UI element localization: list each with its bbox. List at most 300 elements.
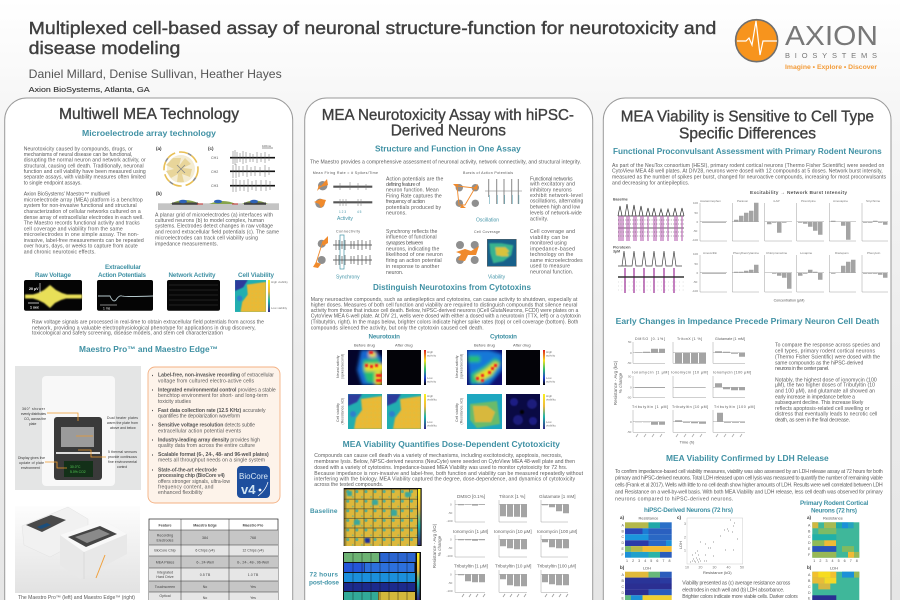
text: species comparison: same compounds as the hiPSC-derived xyxy=(775,360,863,366)
photo: Maestro instrument annotated: provide continuous xyxy=(108,455,137,459)
heatmaps: cytotoxin: Before drug xyxy=(474,342,495,348)
text: introduction: over hours, days, or weeks to capture from acute xyxy=(24,244,138,250)
callout: feature list: toxicity studies xyxy=(158,399,191,405)
text: scatter caption: Viability presented as (c) average resistance across xyxy=(682,581,791,587)
text: introduction: and chronic neurotoxic effects. xyxy=(24,250,96,256)
text: viability: same microelectrodes xyxy=(530,258,583,264)
axis label: time: Time (h) xyxy=(680,440,695,444)
bar chart: Tributyltin early 10 xyxy=(672,405,708,437)
text: viability xyxy=(530,229,583,276)
diagram: oscillation: Bursts of Action Potentials xyxy=(463,171,513,175)
table: Maestro comparison: Feature xyxy=(159,524,171,528)
heatmap: hiPSC resistance: A xyxy=(622,524,624,528)
label: baseline: Baseline xyxy=(310,508,338,515)
diagram: activity: Activity xyxy=(337,216,353,222)
bar chart: 4-AP xyxy=(765,199,792,241)
callout: feature list: Sensitive voltage resolution detects subtle xyxy=(158,423,255,429)
text: LDH paragraph: primary and hiPSC-derived neurons. Total LDH released upon cell lysis was measured to quantify the number of remaining viable xyxy=(615,476,883,482)
bar chart: Phenylbenzylamine: Phenylbenzylamine xyxy=(733,251,759,255)
callout: feature list: meets all throughput needs on a single system xyxy=(158,458,265,464)
text: cytotoxicity paragraph: Compounds can cause cell death via a variety of mechanisms, including excitotoxicity, apoptosis, necrosis, xyxy=(314,453,562,459)
text: oscillation: with excitatory and xyxy=(530,182,575,188)
heatmap: hiPSC LDH: LDH xyxy=(643,566,651,570)
plot: network activity xyxy=(167,280,220,311)
text: introduction: structural, causing cell death. Traditionally, neuronal xyxy=(24,163,144,169)
text: species comparison: To compare the response across species and xyxy=(775,343,880,349)
text: introduction: characterization of cellular networks cultured on a xyxy=(24,209,141,215)
callout: feature list: voltage from cultured electro-active cells xyxy=(158,378,254,384)
chart title: network burst intensity: Excitability → Network Burst Intensity xyxy=(750,190,847,196)
bar chart: Pirenzipine xyxy=(797,199,824,241)
bar chart: Ionomycin [1 µM] xyxy=(446,529,488,558)
bar chart: DMSO early: 50 xyxy=(628,340,632,344)
raster plot: baseline xyxy=(613,198,684,241)
heading: MEA Viability is Sensitive xyxy=(621,109,874,142)
text: oscillation: Functional networks xyxy=(530,176,573,182)
figure: extracellular traces c xyxy=(208,144,275,192)
heatmap: cell viability: Low viability xyxy=(271,306,288,310)
text: oscillation: inhibitory neurons xyxy=(530,187,572,193)
heatmaps: cytotoxin: viability xyxy=(546,398,556,402)
text: cytotoxicity paragraph: across the tested compounds. xyxy=(314,482,383,488)
label: primary rodent cortical neurons xyxy=(800,500,869,515)
text: signal caption xyxy=(32,319,264,337)
bar chart: Amoxicillin: Amoxicillin xyxy=(703,251,718,255)
axis label: resistance change: % change xyxy=(618,372,623,393)
bar chart: Glutamate [1 mM] xyxy=(539,494,576,522)
bar chart: Ionomycin [1 µM]: 0 xyxy=(450,538,452,542)
bar chart: Tributyltin early 1: Tributyltin [1 µM] xyxy=(632,405,668,409)
heatmaps: neurotoxin: (spikes/second) xyxy=(340,354,344,379)
table: Maestro comparison: BioCore Chip xyxy=(154,548,176,552)
axis label: resistance: % change xyxy=(437,535,442,556)
bar chart: Pirenzipine: Pirenzipine xyxy=(801,199,816,203)
text: proconvulsant paragraph: measured as the number of spikes per burst, changed for neuroactive compounds, increasing for most proconvulsants xyxy=(612,175,886,181)
bar chart: Amoxicillin: -100 xyxy=(692,289,698,293)
heatmap: primary rodent resistance: C xyxy=(808,535,811,539)
label: raw voltage: Raw Voltage xyxy=(35,272,71,279)
text: activity: defining feature of xyxy=(386,182,421,188)
text: cytotoxicity paragraph: membrane lysis. Below, NPSC-derived neurons (NeuCyte) were seeded on CytoView MEA 48-well plate and then xyxy=(314,459,575,465)
bar chart: Ionomycin [100 µM] xyxy=(537,529,577,557)
label: 72 hours post-dose xyxy=(309,572,339,586)
table: Maestro comparison: 384 xyxy=(202,536,208,540)
text: synchrony: Synchrony reflects the xyxy=(386,229,437,235)
text: viability: viability can be xyxy=(530,235,568,241)
table: Maestro comparison: Electrodes xyxy=(157,538,174,542)
figure: extracellular traces c: 100ms xyxy=(262,144,272,148)
text: synchrony: likelihood of one neuron xyxy=(386,252,443,258)
heatmaps: cytotoxin: Low xyxy=(546,420,552,424)
bar chart: TritonX early: TritonX [1 %] xyxy=(677,337,702,341)
bar chart: Tributyltin early 1 xyxy=(627,405,668,437)
text: oscillation: oscillations, alternating xyxy=(530,199,583,205)
text: oscillation xyxy=(530,176,583,222)
heading: MEA Neurotoxicity Assay with hiPSC-Derived Neurons: Derived Neurons xyxy=(391,123,506,140)
heatmaps: neurotoxin: (Resistance, kΩ) xyxy=(340,398,344,424)
heatmap: primary rodent resistance: E xyxy=(808,547,811,551)
label: primary rodent cortical neurons: Primary Rodent Cortical xyxy=(800,500,869,507)
diagram: synchrony xyxy=(313,230,372,280)
authors: Daniel Millard, Denise Sullivan, Heather Hayes xyxy=(29,67,282,81)
bar chart: Tributyltin early 10: Tributyltin [10 µM] xyxy=(672,405,708,409)
bar chart: Chlorpromazine: Chlorpromazine xyxy=(766,251,788,255)
label: primary rodent cortical neurons: Neurons (72 hrs) xyxy=(811,508,857,515)
photo: Maestro instrument annotated: 360° shower xyxy=(22,407,46,411)
bar chart: Paroxon xyxy=(732,199,759,241)
bar chart: Tributyltin early 1: 0 xyxy=(630,420,632,424)
subheading: structure and function: Structure and Function in One Assay xyxy=(375,145,521,154)
text: synchrony: synapses between xyxy=(386,241,423,247)
text: viability: used to measure xyxy=(530,264,570,270)
text: synchrony xyxy=(386,229,443,276)
callout: feature list xyxy=(148,367,280,503)
bar chart: Amoxicillin: 0 xyxy=(696,271,698,275)
text: viability: impedance-based xyxy=(530,246,575,252)
bar chart: Tributyltin early 100 xyxy=(713,405,755,437)
bar chart: Tributyltin [1 µM]: -50 xyxy=(448,581,453,585)
heading: MEA Viability is Sensitive: MEA Viability is Sensitive to Cell Type xyxy=(621,109,874,126)
bar chart: Glutamate early: Glutamate [1 mM] xyxy=(715,337,745,341)
text: species comparison: distress that eventually leads to necrotic cell xyxy=(775,412,877,418)
callout: feature list: Scalable format (6-, 24-, 48- and 96-well plates) xyxy=(158,452,269,458)
text: oscillation: between high and low xyxy=(530,205,580,211)
heatmap: hiPSC resistance xyxy=(620,515,672,563)
table: Maestro comparison: 6-, 24-, 48-, 96-Well xyxy=(237,560,269,564)
table: Maestro comparison: Recording xyxy=(157,534,173,538)
bar chart: TritonX [1 %] xyxy=(499,494,527,522)
heatmap: hiPSC resistance: C xyxy=(622,535,624,539)
label: extracellular action potentials: Extracellular xyxy=(105,264,142,271)
heatmap: hiPSC resistance: D xyxy=(622,541,624,545)
bar chart: TritonX early xyxy=(673,337,706,364)
bar chart: Tributyltin [1 µM]: Tributyltin [1 µM] xyxy=(454,564,488,568)
photo: Maestro instrument annotated: warm the plate from xyxy=(107,421,138,425)
bar chart: Phenylbenzylamine xyxy=(732,251,759,292)
heatmaps: neurotoxin: High xyxy=(427,394,434,398)
bar chart: DMSO early: -50 xyxy=(627,361,632,365)
bar chart: Acetaminophen xyxy=(692,199,727,242)
diagram: activity xyxy=(313,171,378,222)
bar chart: Loxapine: Loxapine xyxy=(800,251,813,255)
plot: raw voltage xyxy=(24,280,82,311)
heatmap: primary rodent LDH: C xyxy=(808,585,811,589)
text: activity: potentials produced by xyxy=(386,205,441,211)
heatmap: hiPSC resistance: a) xyxy=(620,515,625,520)
heatmaps: cytotoxin: Cytotoxin xyxy=(490,334,517,340)
bar chart: Strychnine xyxy=(862,199,888,241)
text: species comparison xyxy=(775,343,880,424)
text: activity: neuron function. Mean xyxy=(386,188,439,194)
label: hiPSC-derived neurons: hiPSC-Derived Neurons (72 hrs) xyxy=(644,507,733,514)
bar chart: Ionomycin [10 µM]: Ionomycin [10 µM] xyxy=(494,529,532,534)
heatmap: primary rodent resistance: F xyxy=(808,553,811,557)
subheading: Microelectrode array technology: Microelectrode array technology xyxy=(82,129,217,138)
text: synchrony: in response to another xyxy=(386,264,440,270)
callout: feature list: enhanced flexibility xyxy=(158,490,203,496)
text: synchrony: neuron. xyxy=(386,270,403,276)
plot: raw voltage: 1 sec xyxy=(30,306,39,310)
text: species comparison: µM), the two higher doses of Tributyltin (10 xyxy=(775,383,875,389)
scatter plot: LDH vs resistance: Resistance (kΩ) xyxy=(703,570,732,575)
bar chart: Tributyltin early 1: -50 xyxy=(627,430,632,434)
heatmap: hiPSC LDH: D xyxy=(622,591,624,595)
bar chart: Ionomycin early 100 xyxy=(713,370,751,398)
figure: extracellular traces c: (c) xyxy=(208,146,214,151)
heatmap: hiPSC LDH xyxy=(620,565,672,600)
text: figure caption: cultured neurons (b) to model complex, human xyxy=(155,218,264,224)
heading: MEA Viability is Sensitive: Specific Differences xyxy=(679,125,816,142)
axis label: resistance change: Resistance - Avg (kΩ) xyxy=(613,360,618,405)
table: Maestro comparison: Integrated xyxy=(157,570,173,574)
text: introduction: microelectrode array (MEA) platform is a benchtop xyxy=(24,198,143,204)
bar chart: Acetaminophen: 50 xyxy=(694,211,698,215)
subheading: LDH release: MEA Viability Confirmed by LDH Release xyxy=(666,454,829,463)
text: LDH paragraph: To confirm impedance-based cell viability measures, viability was also assessed by an LDH release assay at 72 hours for both xyxy=(615,469,883,475)
bar chart: Amoxicillin: 100 xyxy=(693,252,698,256)
heatmaps: neurotoxin: Before drug xyxy=(354,342,375,348)
callout: feature list: benchtop environment for short- and long-term xyxy=(158,393,268,399)
text: LDH paragraph: neurons compared to hiPSC-derived neurons. xyxy=(615,496,733,502)
bar chart: Tributyltin [100 µM] xyxy=(537,564,576,597)
text: distinguish paragraph: compounds silenced the activity, but only the cytotoxin caused cell death. xyxy=(311,326,484,332)
text: activity: frequency of action xyxy=(386,199,425,205)
table: Maestro comparison: 768 xyxy=(250,536,256,540)
callout: feature list: Industry-leading array density provides high xyxy=(158,437,260,443)
label: extracellular action potentials: Action Potentials xyxy=(98,272,146,279)
affiliation: Axion BioSystems, Atlanta, GA xyxy=(29,85,150,94)
callout: feature list: quantifies the depolarization waveform xyxy=(158,414,240,420)
bar chart: Ionomycin early 1: Ionomycin [1 µM] xyxy=(632,370,669,374)
heatmaps: neurotoxin: Neurotoxin xyxy=(368,334,400,340)
title: Multiplexed cell-based assay of neuronal structure-function for neurotoxicity and xyxy=(29,18,716,38)
label: network activity: Network Activity xyxy=(168,272,216,279)
axis label: resistance xyxy=(432,523,442,568)
text: scatter caption: electrodes in each well and (b) LDH absorbance. xyxy=(682,587,784,593)
text: synchrony: influence of functional xyxy=(386,235,437,241)
bar chart: Diazepam xyxy=(829,251,856,292)
icon: BioCore v4 badge: BioCore xyxy=(239,472,269,481)
logo: Axion BioSystems: AXION xyxy=(785,20,878,51)
bar chart: Acetaminophen: Acetaminophen xyxy=(700,199,721,203)
plot: action potentials: 1 ms xyxy=(103,306,110,310)
table: Maestro comparison: Maestro Pro xyxy=(243,524,264,528)
diagram: activity: Mean Firing Rate = # Spikes/Time xyxy=(313,171,378,175)
text: introduction: mechanisms of neural disease can be functional, xyxy=(24,152,132,158)
callout: feature list: processing chip (BioCore v4) xyxy=(158,473,225,479)
text: cytotoxicity paragraph: dosed with a variety of cytotoxins. Impedance-based MEA Viability was used to monitor cytotoxicity for 72 hrs. xyxy=(314,465,567,471)
photo: Maestro instrument annotated: update of plate xyxy=(19,461,44,465)
bar chart: Acetaminophen: -100 xyxy=(692,238,698,242)
heatmaps: neurotoxin: viability xyxy=(427,398,437,402)
text: figure caption: and record extracellular field potentials (c). The same xyxy=(155,230,279,236)
table: Maestro comparison: 6 Chips (v4) xyxy=(195,548,215,552)
table: Maestro comparison: Touchscreen xyxy=(155,585,175,589)
heatmap: cell viability: High viability xyxy=(271,280,288,284)
text: figure caption: impedance measurements. xyxy=(155,241,218,247)
figure: extracellular traces c: CH1 xyxy=(211,156,218,160)
text: proconvulsant paragraph: and decreasing for antiepileptics. xyxy=(612,180,689,186)
text: figure caption: microelectrodes can track cell viability using xyxy=(155,235,258,241)
bar chart: Acetaminophen: 100 xyxy=(693,201,698,205)
heading: MEA Neurotoxicity Assay with hiPSC-Derived Neurons: MEA Neurotoxicity Assay with hiPSC- xyxy=(322,107,574,124)
diagram: synchrony: Synchrony xyxy=(336,274,360,280)
photo: Maestro instrument annotated: fine environmental xyxy=(108,460,137,464)
text: introduction: dense array of extracellular electrodes in each well. xyxy=(24,215,144,221)
diagram: viability: Cell Coverage xyxy=(474,230,500,234)
bar chart: Tributyltin [10 µM] xyxy=(495,564,531,597)
text: introduction: cell coverage and viability from the same xyxy=(24,226,123,232)
bar chart: DMSO [0.1%] xyxy=(446,494,485,523)
text: LDH paragraph: cells (Frank et al 2017). Wells with little to no cell death show higher amounts of LDH. Results were well correlated between LDH xyxy=(615,483,883,489)
photo: Maestro Pro and Maestro Edge xyxy=(15,506,140,593)
bar chart: Chlorpromazine xyxy=(765,251,792,292)
bar chart: 4-AP: 4-AP xyxy=(773,199,780,203)
label: extracellular action potentials xyxy=(98,264,146,279)
heatmaps: neurotoxin: activity xyxy=(427,380,437,384)
label: 72 hours post-dose: 72 hours xyxy=(310,572,338,579)
text: LDH paragraph: and Resistance on a well-by-well basis. With both MEA Viability and LDH release, less cell death was observed for primary xyxy=(615,489,883,495)
table: Maestro comparison xyxy=(149,519,278,600)
subheading: early changes in impedance: Early Changes in Impedance Precede Primary Neuron Cell Death xyxy=(616,317,879,326)
heatmaps: cytotoxin: Low xyxy=(546,376,552,380)
heatmap: primary rodent resistance: D xyxy=(808,541,811,545)
photo: Maestro instrument annotated: 5.0% CO2 xyxy=(70,470,86,474)
heatmaps: neurotoxin: activity xyxy=(427,354,437,358)
heatmap: primary rodent resistance: 1 2 3 4 5 6 7 8 xyxy=(813,559,858,563)
icon: BioCore v4 badge xyxy=(237,466,270,498)
logo: Axion BioSystems xyxy=(736,20,878,71)
title xyxy=(29,18,716,58)
heatmaps: cytotoxin: High xyxy=(546,394,553,398)
diagram: viability: Viability xyxy=(488,274,506,280)
text: distinguish paragraph: (Tributyltin, right). In the maps below, brighter colors indicate higher spike rates (top) or cell coverage (bottom). Both xyxy=(311,320,578,326)
diagram: viability xyxy=(456,230,516,280)
text: distinguish paragraph: Many neuroactive compounds, such as antiepileptics and cytotoxins, can cause activity to shutdown, especially at xyxy=(311,297,578,303)
photo: Maestro instrument annotated: 30.0°C xyxy=(70,465,81,469)
plate map: baseline xyxy=(344,488,422,546)
bar chart: Diazepam: Diazepam xyxy=(835,251,849,255)
bar chart: Tributyltin [1 µM] xyxy=(446,564,488,597)
text: signal caption: toxicological and safety screening, disease models, and stem cell characterization xyxy=(32,331,223,337)
text: activity: neurons. xyxy=(386,211,407,217)
bar chart: Tributyltin [100 µM]: Tributyltin [100 µM] xyxy=(537,564,576,568)
heatmap: hiPSC resistance: E xyxy=(622,547,624,551)
text: distinguish paragraph xyxy=(311,297,581,332)
bar chart: DMSO early: DMSO [0.1%] xyxy=(635,337,665,341)
bar chart: Amoxicillin: -50 xyxy=(693,280,698,284)
scatter plot: LDH vs resistance: 2 xyxy=(684,536,686,540)
text: LDH paragraph xyxy=(615,469,883,502)
diagram: oscillation xyxy=(453,171,522,224)
bar chart: Glutamate early xyxy=(713,337,745,363)
plate map: 72 hours post-dose xyxy=(343,552,421,600)
plot: raw voltage: 20 µV xyxy=(29,287,39,291)
bar chart: Ionomycin early 1: 50 xyxy=(628,374,632,378)
heatmap: primary rodent LDH: b) xyxy=(807,565,812,570)
text: signal caption: network, providing a valuable electrophysiological phenotype for applications in drug discovery, xyxy=(32,325,256,331)
subheading: Maestro Pro and Maestro Edge: Maestro Pro™ and Maestro Edge™ xyxy=(79,345,218,354)
text: figure caption: A planar grid of microelectrodes (a) interfaces with xyxy=(155,212,273,218)
text: species comparison: reflects apoptosis-related cell swelling or xyxy=(775,406,870,412)
bar chart: TritonX [1 %]: TritonX [1 %] xyxy=(499,494,525,499)
scatter plot: LDH vs resistance: 1 xyxy=(684,548,686,552)
panel: Multiwell MEA Technology xyxy=(5,98,293,600)
heatmaps: neurotoxin: Low xyxy=(427,376,433,380)
photo: Maestro instrument annotated: evenly distributes xyxy=(21,412,46,416)
table: Maestro comparison: Hard Drive xyxy=(156,575,174,579)
table: Maestro comparison: Yes xyxy=(250,585,256,589)
text: signal caption: Raw voltage signals are processed in real-time to obtain extracellular field potentials from across the xyxy=(32,319,264,325)
text: introduction: separate assays, with viability measures often limited xyxy=(24,175,146,181)
heatmap: primary rodent resistance: Resistance xyxy=(823,516,844,520)
bar chart: Ionomycin early 1 xyxy=(627,370,669,400)
subheading: dose-dependent cytotoxicity: MEA Viability Quantifies Dose-Dependent Cytotoxicity xyxy=(343,440,561,449)
text: proconvulsant paragraph: CytoView MEA 48 well plates. At DIV28, neurons were dosed with 12 compounds at 5 doses. Network burst intensity, xyxy=(612,169,883,175)
text: viability: monitored using xyxy=(530,241,567,247)
text: synchrony: neurons, indicating the xyxy=(386,246,439,252)
photo: Maestro instrument annotated: environment xyxy=(21,466,40,470)
text: species comparison: early increase in impedance before a xyxy=(775,394,855,400)
heatmaps: neurotoxin: High xyxy=(427,350,434,354)
text: species comparison: neurons in the center panel. xyxy=(775,366,829,372)
label: cell viability: Cell Viability xyxy=(238,272,274,279)
scatter plot: LDH vs resistance: 30 xyxy=(712,566,716,570)
text: introduction: Axion BioSystems' Maestro™ multiwell xyxy=(24,192,110,198)
heatmap: primary rodent LDH: LDH xyxy=(830,566,838,570)
bar chart: Glutamate [1 mM]: Glutamate [1 mM] xyxy=(539,494,576,499)
scatter plot: LDH vs resistance: LDH xyxy=(678,541,683,549)
diagram: synchrony: Connectivity xyxy=(336,230,360,234)
text: oscillation: exhibit network-level xyxy=(530,193,583,199)
bar chart: Ionomycin [1 µM]: -100 xyxy=(446,554,453,558)
heatmaps: cytotoxin: activity xyxy=(546,354,556,358)
bar chart: DMSO [0.1%]: 0 xyxy=(450,502,452,506)
text: species comparison: subsequent decline. This increase likely xyxy=(775,400,864,406)
heatmap: hiPSC LDH: C xyxy=(622,585,624,589)
axis label: resistance change xyxy=(613,360,623,405)
bar chart: Ionomycin early 1: 0 xyxy=(630,386,632,390)
bar chart: Amoxicillin: 50 xyxy=(694,262,698,266)
text: species comparison: death, as seen in the final decrease. xyxy=(775,418,850,424)
heatmaps: neurotoxin: viability xyxy=(427,424,437,428)
text: species comparison: Notably, the highest dose of ionomycin (100 xyxy=(775,377,877,383)
plot: action potentials xyxy=(97,280,153,311)
text: activity xyxy=(386,177,443,217)
heatmaps: neurotoxin: Low xyxy=(427,420,433,424)
heatmaps: cytotoxin: activity xyxy=(546,380,556,384)
logo: Axion BioSystems: Imagine • Explore • Discover xyxy=(785,64,878,71)
callout: feature list: Label-free, non-invasive recording of extracellular xyxy=(158,373,274,379)
bar chart: Loxapine xyxy=(797,251,824,292)
axis label: resistance: Resistance - Avg (kΩ) xyxy=(432,523,437,568)
heatmap: primary rodent LDH: B xyxy=(808,579,811,583)
heatmaps: neurotoxin: Cell viability xyxy=(336,403,340,422)
axis label: concentration: Concentration (µM) xyxy=(774,299,804,303)
heatmaps: cytotoxin xyxy=(455,334,556,429)
table: Maestro comparison: 6-, 24-Well xyxy=(196,560,214,564)
bar chart: Phenytoin xyxy=(862,251,888,292)
heatmaps: cytotoxin: Neural activity xyxy=(455,355,459,378)
text: distinguish paragraph: higher doses. Measures of both cell function and viability are required to distinguish compounds that silence neural xyxy=(311,303,577,309)
callout: feature list: offers stronger signals, ultra-low xyxy=(158,479,230,485)
heatmap: hiPSC resistance: F xyxy=(622,553,624,557)
text: scatter caption xyxy=(682,581,798,600)
photo: Maestro instrument annotated: Dual heater plates xyxy=(107,416,138,420)
photo: Maestro instrument annotated: above and below xyxy=(110,426,136,430)
photo: Maestro instrument annotated xyxy=(15,366,141,490)
text: activity: Firing Rate captures the xyxy=(386,193,442,199)
